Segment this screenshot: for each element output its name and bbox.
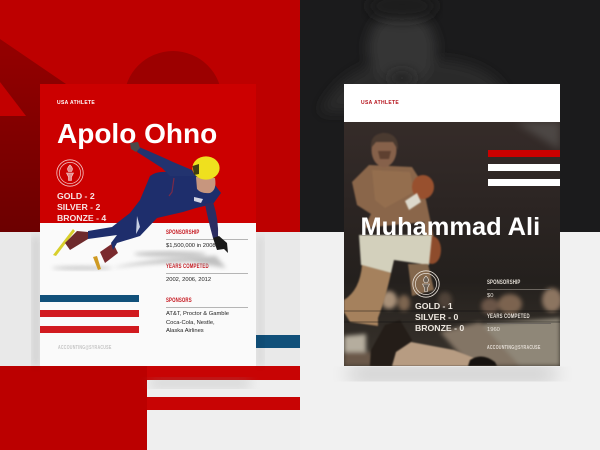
medal counts: BRONZE - 4 — [57, 213, 106, 223]
sponsorship block: SPONSORSHIP — [487, 279, 520, 286]
suit details — [194, 197, 203, 203]
illustration: speed skater — [53, 142, 228, 272]
skate blades — [53, 229, 75, 256]
figures — [344, 133, 497, 366]
medal counts: BRONZE - 0 — [415, 323, 464, 333]
medal counts: GOLD - 1 — [415, 301, 453, 311]
flag stripes — [40, 295, 139, 333]
sponsors block: Coca-Cola, Nestle, — [166, 320, 215, 326]
years competed block: 1960 — [487, 327, 500, 333]
red card header — [40, 84, 256, 223]
eyebrow label: USA ATHLETE — [361, 100, 399, 106]
white card header — [344, 84, 560, 122]
footer credit: ACCOUNTING@SYRACUSE — [58, 345, 112, 351]
medal counts — [57, 191, 106, 223]
sponsors block: SPONSORS — [166, 297, 192, 304]
sponsors block: AT&T, Proctor & Gamble — [166, 311, 229, 317]
icon: torch emblem — [56, 159, 84, 187]
blue stripe behind card — [256, 335, 300, 348]
medal counts — [415, 301, 464, 333]
crowd and canvas — [344, 288, 562, 366]
sponsorship block: $1,500,000 in 2008 — [166, 243, 216, 249]
years competed block — [487, 313, 551, 333]
raised hand — [130, 142, 140, 152]
boots — [65, 231, 88, 250]
panel: Apolo Ohno card — [40, 84, 256, 366]
lowered arm — [205, 202, 218, 238]
bottom-left red block — [0, 366, 147, 450]
glove — [213, 236, 228, 253]
title: athlete name: Muhammad Ali — [360, 213, 540, 241]
sponsors block: Alaska Airlines — [166, 328, 204, 334]
face — [196, 177, 215, 193]
medal counts: SILVER - 2 — [57, 202, 100, 212]
photo: boxer standing over fallen opponent — [344, 122, 560, 366]
footer credit: ACCOUNTING@SYRACUSE — [487, 345, 541, 351]
sponsorship block: SPONSORSHIP — [166, 229, 199, 236]
title: athlete name: Apolo Ohno — [57, 118, 217, 149]
panel: Muhammad Ali card — [344, 84, 560, 366]
stripes — [488, 150, 560, 186]
eyebrow label: USA ATHLETE — [57, 100, 95, 106]
icon: torch emblem — [412, 270, 440, 298]
sponsorship block — [166, 229, 248, 249]
medal counts: SILVER - 0 — [415, 312, 458, 322]
helmet — [192, 156, 220, 180]
years competed block — [166, 263, 248, 283]
medal counts: GOLD - 2 — [57, 191, 95, 201]
sponsors block — [166, 297, 248, 334]
sponsorship block — [487, 279, 551, 299]
years competed block: YEARS COMPETED — [166, 263, 209, 270]
years competed block: 2002, 2006, 2012 — [166, 277, 211, 283]
bottom red stripes — [147, 366, 300, 410]
years competed block: YEARS COMPETED — [487, 313, 530, 320]
sponsorship block: $0 — [487, 293, 493, 299]
raised arm — [137, 147, 195, 176]
suit body and legs — [88, 172, 221, 250]
